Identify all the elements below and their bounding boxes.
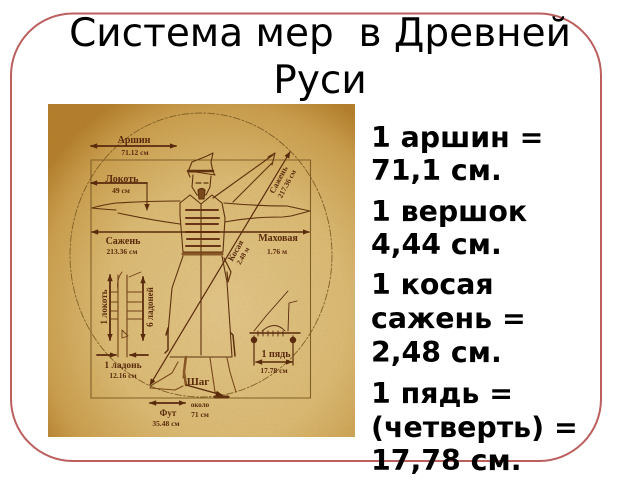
span: (четверть) = [371,411,578,444]
forearm and palms scale [111,272,143,357]
arshin: 71,1 см. [371,154,502,187]
oblique sazhen: 2,48 см. [371,336,502,369]
diagram labels: 213.36 см [107,247,137,256]
title [69,11,571,103]
diagram labels: Шаг [187,376,209,388]
diagram labels: 1 пядь [261,349,291,360]
raised arm [213,153,275,202]
arshin [371,121,543,187]
span: 17,78 см. [371,444,522,477]
diagram labels: 49 см [112,186,130,195]
diagram labels: Сажень [106,236,141,247]
diagram labels: 2.48 м [235,246,252,266]
arshin: 1 аршин = [371,121,543,154]
diagram labels: Аршин [118,135,151,146]
span: 1 пядь = [371,377,513,410]
right arm [224,203,310,222]
diagram labels: около [191,401,210,409]
diagram labels: 71 см [191,410,209,419]
diagram labels: 17.78 см [260,366,288,375]
measure lines [91,146,309,403]
measuring square and circle [70,113,332,398]
diagram labels: 1 ладонь [104,361,142,371]
span [371,377,578,477]
vershok: 4,44 см. [371,228,502,261]
diagram labels: 6 ладоней [145,287,155,327]
diagram labels: Маховая [258,233,298,244]
coat [168,254,232,357]
diagram labels: 1 локоть [99,289,109,324]
diagram labels: 12.16 см [109,371,137,380]
title: Руси [273,58,367,103]
oblique sazhen: 1 косая [371,268,494,301]
diagram drawing [70,113,332,403]
diagram labels: Косая [225,238,246,263]
parchment background [48,104,355,437]
oblique sazhen [371,268,526,369]
diagram labels: Локоть [106,174,139,185]
hanging hands [165,328,235,356]
diagram labels: Сажень [267,164,290,195]
diagram labels: Фут [160,408,177,418]
left arm [92,201,180,224]
vershok: 1 вершок [371,195,527,228]
diagram labels: 35.48 см [152,419,180,428]
diagram labels: 71.12 см [121,148,149,157]
diagram labels [99,135,298,428]
diagram labels: 1.76 м [267,247,287,256]
figure of a man [92,153,310,397]
span measure [250,291,300,365]
title: Система мер в Древней [69,11,571,56]
panel: vintage diagram of body measures [48,104,355,437]
text block: measures list [371,121,578,477]
vershok [371,195,527,261]
legs and boots [150,358,185,390]
oblique sazhen: сажень = [371,302,526,335]
diagram labels: 217.36 см [276,168,298,200]
